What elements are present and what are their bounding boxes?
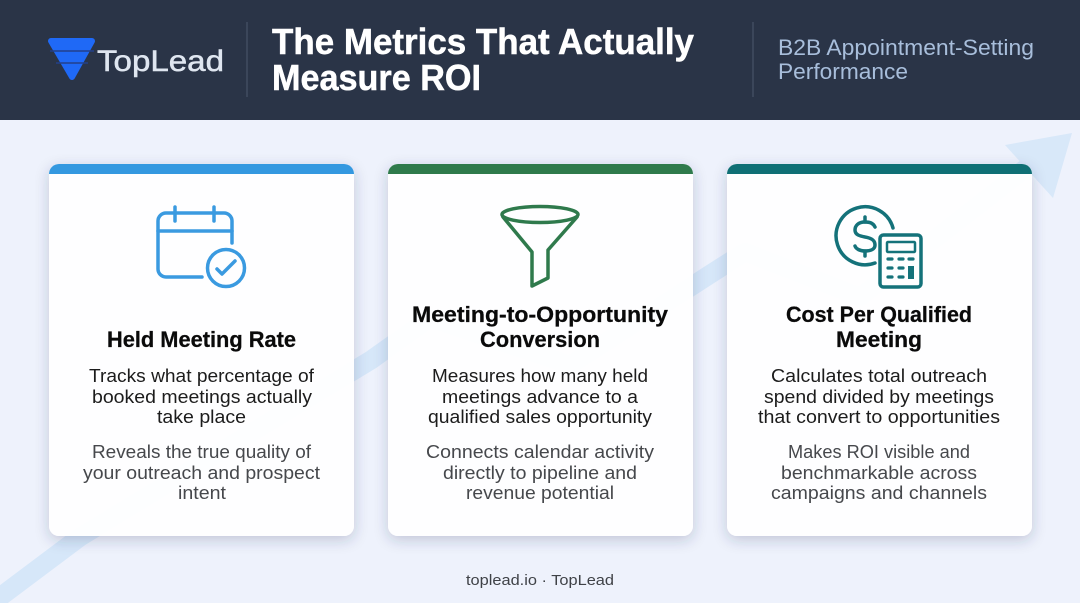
- description: take place: [157, 406, 246, 427]
- description: qualified sales opportunity: [428, 406, 653, 427]
- logo wordmark: TopLead: [97, 45, 224, 78]
- panel: cost per qualified meeting: [727, 164, 1032, 536]
- supporting note: [83, 441, 320, 503]
- description: booked meetings actually: [92, 386, 313, 407]
- supporting note: directly to pipeline and: [443, 462, 637, 483]
- supporting note: your outreach and prospect: [83, 462, 320, 483]
- logo: [50, 41, 224, 78]
- description: Measures how many held: [432, 365, 648, 386]
- subtitle: [778, 35, 1034, 84]
- description: [89, 365, 315, 427]
- description: [758, 365, 1000, 427]
- heading: Meeting: [836, 327, 922, 352]
- title: Measure ROI: [272, 57, 481, 98]
- panel: meeting-to-opportunity conversion: [388, 164, 693, 536]
- heading: Meeting-to-Opportunity: [412, 302, 669, 327]
- icon: funnel logo mark: [50, 41, 94, 77]
- panel: held meeting rate: [49, 164, 354, 536]
- subtitle: B2B Appointment-Setting: [778, 35, 1034, 60]
- description: that convert to opportunities: [758, 406, 1000, 427]
- description: spend divided by meetings: [764, 386, 994, 407]
- heading: [786, 302, 972, 352]
- supporting note: [771, 441, 987, 503]
- title: [272, 21, 694, 98]
- supporting note: Reveals the true quality of: [92, 441, 312, 462]
- supporting note: campaigns and channels: [771, 482, 987, 503]
- supporting note: [426, 441, 655, 503]
- supporting note: revenue potential: [466, 482, 614, 503]
- description: Calculates total outreach: [771, 365, 987, 386]
- footer: toplead.io · TopLead: [466, 572, 614, 589]
- heading: Conversion: [480, 327, 600, 352]
- supporting note: benchmarkable across: [781, 462, 977, 483]
- title: The Metrics That Actually: [272, 21, 694, 62]
- icon: calendar with check: [158, 207, 244, 286]
- description: [428, 365, 653, 427]
- icon: funnel: [502, 206, 578, 286]
- supporting note: Makes ROI visible and: [788, 441, 970, 462]
- supporting note: Connects calendar activity: [426, 441, 655, 462]
- background growth arrow: [0, 133, 1072, 603]
- subtitle: Performance: [778, 59, 908, 84]
- description: meetings advance to a: [442, 386, 639, 407]
- supporting note: intent: [178, 482, 226, 503]
- heading: [412, 302, 669, 352]
- heading: Cost Per Qualified: [786, 302, 972, 327]
- icon: dollar coin and calculator: [836, 207, 921, 287]
- heading: Held Meeting Rate: [107, 327, 296, 352]
- description: Tracks what percentage of: [89, 365, 315, 386]
- header band: [0, 0, 1080, 120]
